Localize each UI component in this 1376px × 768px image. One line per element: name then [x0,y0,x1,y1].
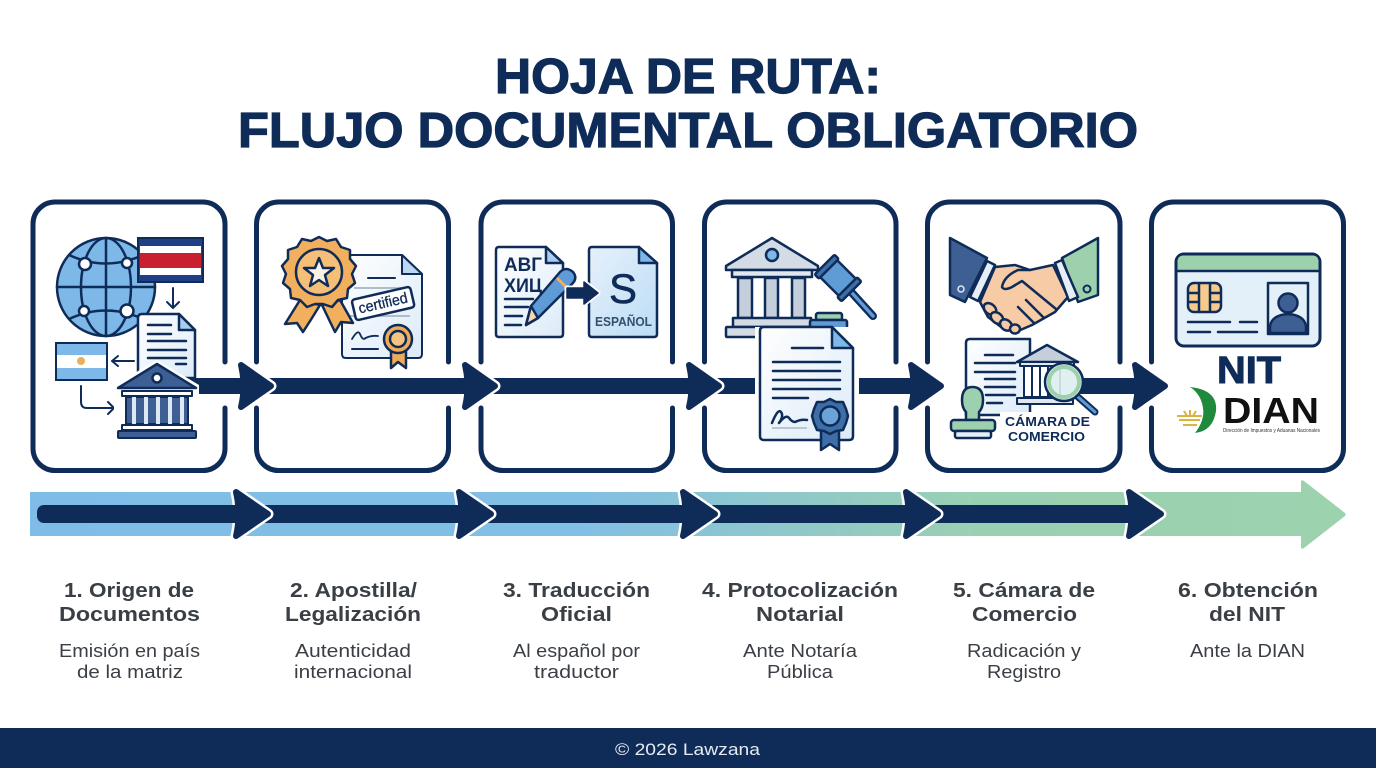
step 2 label: Legalización [285,603,421,626]
icon: DIAN crescent logo [1177,387,1216,433]
step 1 label: de la matriz [77,662,183,682]
arrow: flag to bank [81,386,114,414]
panel: card 5 frame [928,202,1120,470]
step 3 label [503,579,650,682]
icon: globe, flags, document and bank [56,238,203,442]
icon: certified document [342,255,422,358]
step 6 label: 6. Obtención [1178,579,1318,602]
icon: notary bank, gavel and deed [726,238,873,450]
icon: handshake [950,238,1098,334]
step 5 label: Registro [987,662,1061,682]
icon: bank [114,360,199,442]
title [238,50,1138,158]
arrow: lower connector chain [37,492,1161,536]
icon: Argentina flag [56,343,107,380]
step 1 label: Emisión en país [59,641,200,661]
icon: globe [57,238,155,336]
icon: certified stamp: certified [357,290,409,317]
arrow: translation [567,282,598,304]
step 4 label: Pública [767,662,834,682]
title: HOJA DE RUTA: [495,50,881,104]
arrow: flag to document [167,288,179,308]
icon: source document: АВГ [504,255,542,276]
icon: gavel [815,255,873,316]
icon: stamp behind deed [810,313,847,329]
icon: translation documents [496,247,657,337]
icon: ribbon rosette [282,237,356,332]
step 1 label: Documentos [59,603,200,626]
panel: card 3 frame [481,202,672,470]
icon: NIT card and DIAN logo [1176,254,1320,434]
step 2 label [285,579,421,682]
heading: NIT: NIT [1217,350,1281,392]
label: Cámara de Comercio: CÁMARA DE [1005,414,1090,429]
icon: Spanish document: S [609,265,637,312]
step 6 label: Ante la DIAN [1190,641,1305,661]
step 1 label: 1. Origen de [64,579,194,602]
panel: card 1 frame [33,202,225,470]
icon: notary bank [726,238,818,337]
step 2 label: internacional [294,662,412,682]
step 5 label [953,579,1095,682]
icon: Costa Rica flag [138,238,203,282]
icon: notarial deed [756,327,858,450]
step 3 label: traductor [534,662,619,682]
label: Cámara de Comercio [1000,412,1094,444]
icon: chamber building [1017,345,1078,404]
icon: ID card [1176,254,1320,346]
icon: pencil [526,269,575,325]
step 4 label [702,579,898,682]
step 2 label: Autenticidad [295,641,411,661]
step 4 label: Ante Notaría [743,641,858,661]
icon: small seal [384,325,412,368]
arrow: document to flag [112,356,134,366]
icon: magnifying glass [1045,363,1095,412]
step 5 label: 5. Cámara de [953,579,1095,602]
step 5 label: Comercio [972,603,1077,626]
step 1 label [59,579,200,682]
step 3 label: Al español por [513,641,640,661]
icon: Spanish document [589,247,657,337]
footer text: © 2026 Lawzana [615,740,761,759]
panel: card 4 frame [704,202,896,470]
footer bar [0,728,1376,768]
icon: rubber stamp [951,387,995,438]
progress band [30,480,1346,549]
label: Cámara de Comercio: COMERCIO [1008,429,1085,444]
icon: document [138,314,195,378]
step 2 label: 2. Apostilla/ [290,579,417,602]
icon: Spanish document: ESPAÑOL [595,314,652,329]
label: DIAN caption: Dirección de Impuestos y Aduanas Nacionales [1223,428,1320,434]
step 6 label: del NIT [1209,603,1286,626]
panel: card 2 frame [256,202,448,470]
icon: apostille seal and certified document [282,237,422,368]
step 3 label: 3. Traducción [503,579,650,602]
step 5 label: Radicación y [967,641,1081,661]
icon: handshake and chamber of commerce [950,238,1098,444]
step 4 label: Notarial [756,603,844,626]
step 6 label [1178,579,1318,661]
arrow: upper connector chain [190,365,1165,407]
label: DIAN: DIAN [1223,390,1319,431]
step 3 label: Oficial [541,603,612,626]
icon: registry document [966,339,1030,415]
title: FLUJO DOCUMENTAL OBLIGATORIO [238,104,1138,158]
icon: source document [496,247,563,337]
icon: source document: ХИЦ [504,276,542,297]
step 4 label: 4. Protocolización [702,579,898,602]
panel: card 6 frame [1152,202,1344,470]
